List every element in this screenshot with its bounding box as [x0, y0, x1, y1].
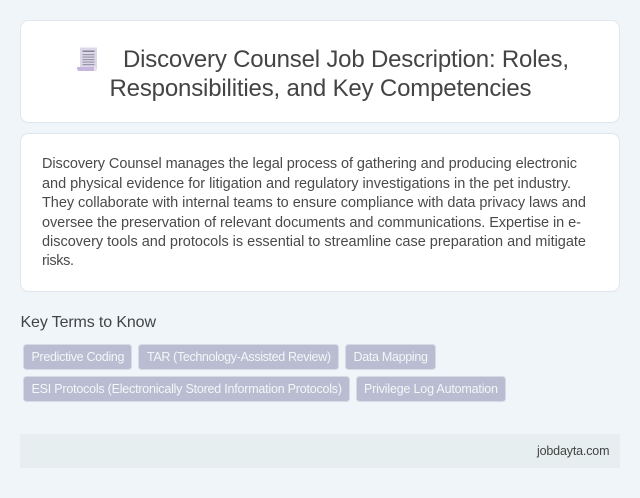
tag: TAR: TAR (Technology-Assisted Review) [147, 350, 331, 364]
tag: privilege log automation: Privilege Log Automation [364, 382, 498, 396]
title [110, 46, 569, 102]
tag: predictive coding: Predictive Coding [32, 350, 125, 364]
description text: They collaborate with internal teams to ensure compliance with data privacy laws and [42, 195, 586, 211]
tag: ESI protocols [24, 376, 350, 402]
tag: predictive coding [24, 344, 132, 370]
tag: data mapping [346, 344, 436, 370]
tag: data mapping: Data Mapping [354, 350, 428, 364]
description text: Discovery Counsel manages the legal process of gathering and producing electronic [42, 156, 577, 172]
description text: and physical evidence for litigation and regulatory investigations in the pet industry. [42, 176, 571, 192]
heading: key terms: Key Terms to Know [20, 314, 156, 331]
tag list [24, 344, 506, 402]
description text: oversee the preservation of relevant documents and communications. Expertise in e- [42, 215, 581, 231]
tag: ESI protocols: ESI Protocols (Electronically Stored Information Protocols) [32, 382, 342, 396]
icon: document scroll [77, 48, 97, 71]
description text: risks. [42, 253, 74, 269]
panel: title card [20, 20, 620, 122]
footer source: jobdayta.com [536, 444, 610, 458]
tag: TAR [138, 344, 338, 370]
footer bar [20, 434, 620, 468]
panel: description [20, 134, 620, 292]
title: Responsibilities, and Key Competencies [110, 75, 532, 102]
description text [42, 156, 586, 269]
tag: privilege log automation [356, 376, 506, 402]
description text: discovery tools and protocols is essential to streamline case preparation and mitigate [42, 234, 586, 250]
title: Discovery Counsel Job Description: Roles, [123, 46, 569, 73]
